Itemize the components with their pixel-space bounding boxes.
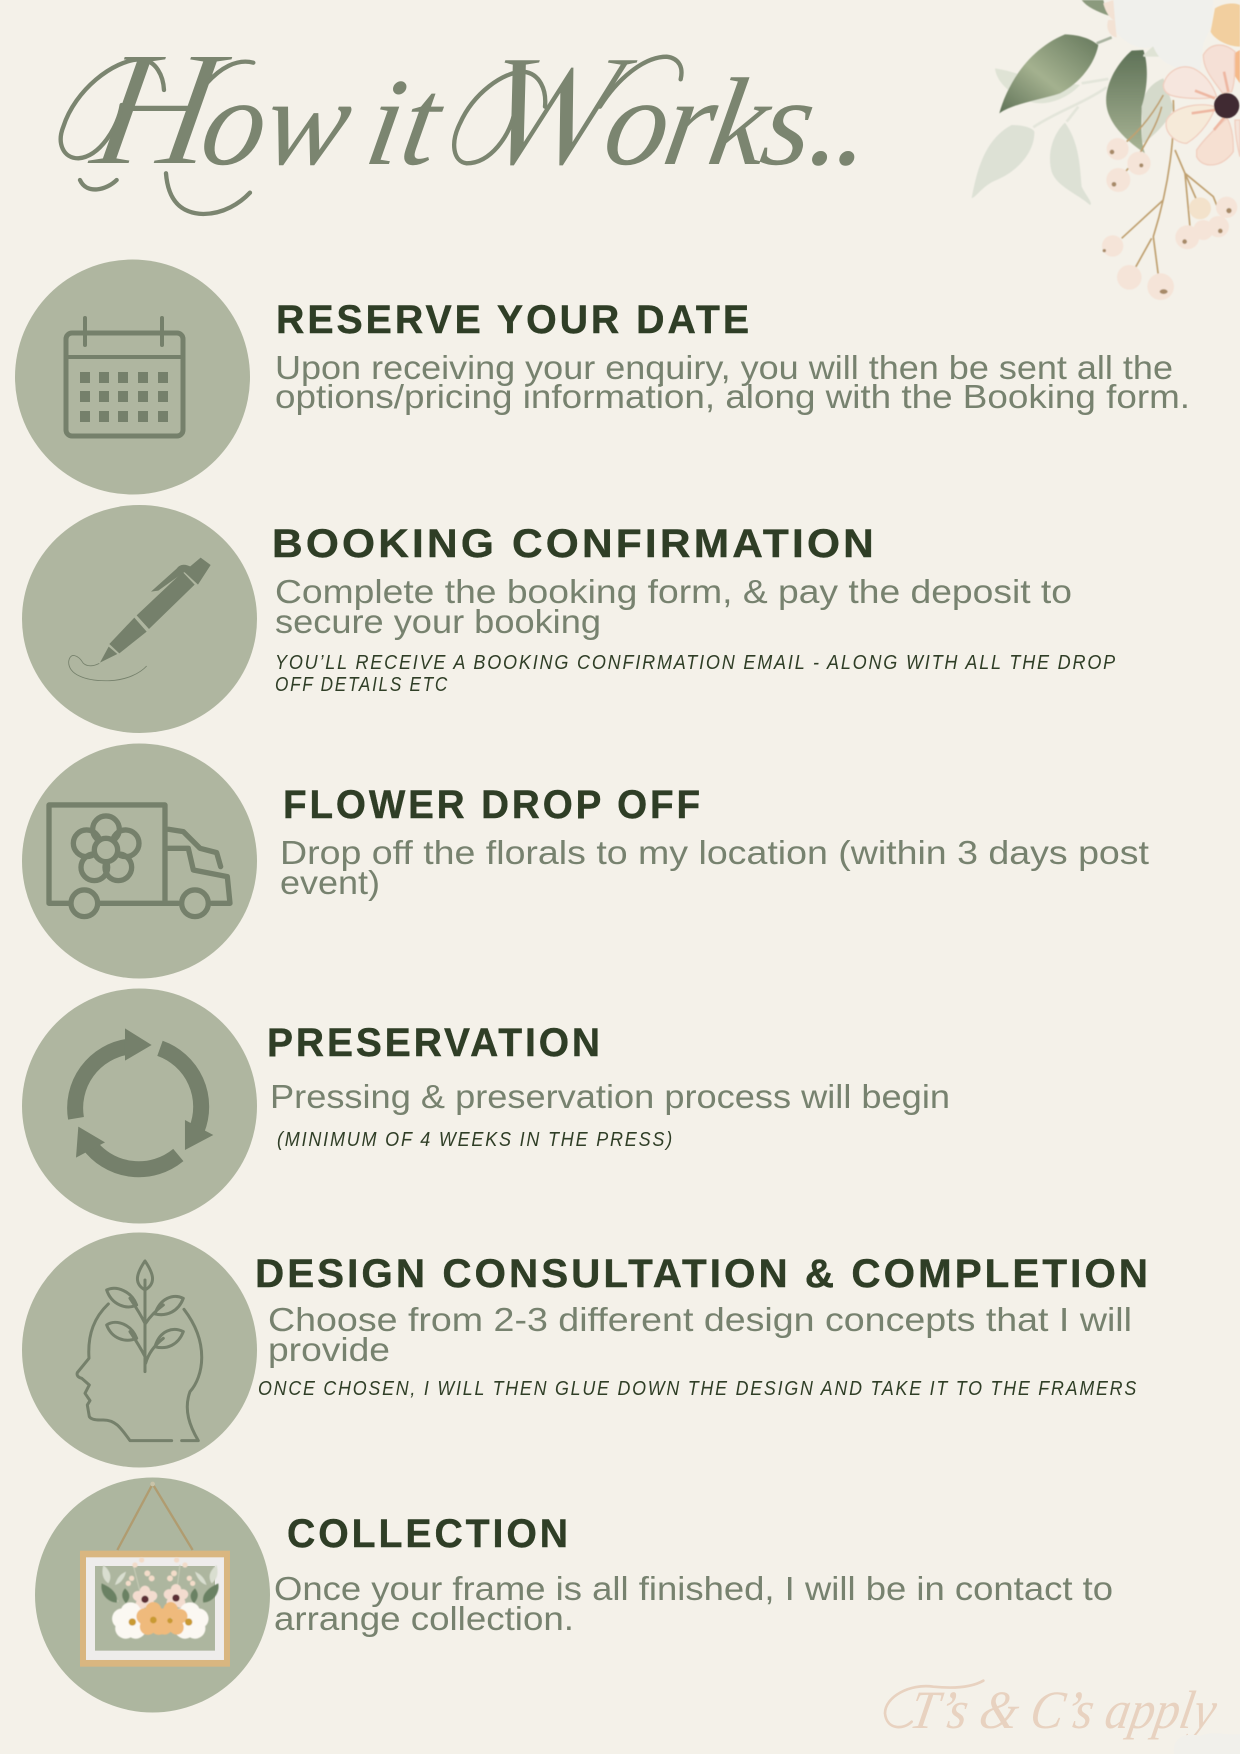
paper scrap, bottom right: [1174, 1733, 1240, 1754]
floral decoration: [972, 0, 1240, 300]
note: YOU’LL RECEIVE A BOOKING CONFIRMATION EMAIL - ALONG WITH ALL THE DROP: [275, 652, 1117, 674]
footer: terms note: T’s & C’s apply: [906, 1680, 1222, 1740]
step 2: booking confirmation: [22, 505, 1117, 733]
step 6: collection: [35, 1478, 1113, 1712]
heading: FLOWER DROP OFF: [283, 783, 703, 827]
note: ONCE CHOSEN, I WILL THEN GLUE DOWN THE DESIGN AND TAKE IT TO THE FRAMERS: [258, 1378, 1138, 1400]
body text: [275, 349, 1190, 415]
note: [275, 652, 1117, 696]
icon circle: [22, 1232, 257, 1468]
icon circle: [35, 1478, 270, 1712]
body text: secure your booking: [275, 603, 601, 640]
step 5: design consultation: [22, 1232, 1151, 1468]
note: OFF DETAILS ETC: [275, 674, 449, 696]
title flourish: [61, 57, 681, 214]
heading: COLLECTION: [287, 1512, 571, 1556]
step 1: reserve your date: [15, 260, 1190, 494]
icon: calendar: [66, 318, 183, 436]
step 3: flower drop off: [22, 744, 1149, 978]
body text: provide: [268, 1331, 390, 1368]
body text: Once your frame is all finished, I will be in contact to: [274, 1570, 1113, 1607]
heading: DESIGN CONSULTATION & COMPLETION: [255, 1252, 1151, 1296]
body text: [274, 1570, 1113, 1637]
body text: Drop off the florals to my location (within 3 days post: [280, 834, 1149, 871]
body text: [268, 1301, 1132, 1368]
note: (MINIMUM OF 4 WEEKS IN THE PRESS): [277, 1129, 674, 1151]
body text: [280, 834, 1149, 901]
body text: Complete the booking form, & pay the deposit to: [275, 573, 1072, 610]
icon: pen: [69, 558, 211, 681]
heading: PRESERVATION: [267, 1021, 603, 1065]
heading: RESERVE YOUR DATE: [276, 298, 752, 342]
body text: options/pricing information, along with the Booking form.: [275, 378, 1190, 415]
title: ..: [801, 54, 880, 192]
icon: head with plant: [77, 1261, 202, 1441]
step 4: preservation: [22, 988, 950, 1224]
title: it: [357, 54, 482, 192]
heading: BOOKING CONFIRMATION: [272, 522, 877, 566]
icon: cycle arrows: [75, 1028, 213, 1169]
body text: [275, 573, 1072, 640]
icon circle: [22, 505, 257, 733]
icon circle: [15, 260, 250, 494]
icon: hanging frame: [80, 1482, 230, 1667]
title: orks: [595, 54, 823, 192]
title: ow: [192, 54, 394, 192]
icon: truck: [49, 805, 230, 917]
title: [61, 17, 886, 214]
icon circle: [22, 988, 257, 1224]
body text: Pressing & preservation process will begin: [270, 1078, 950, 1115]
title: W: [469, 21, 646, 199]
body text: Choose from 2-3 different design concepts that I will: [268, 1301, 1132, 1338]
body text: Upon receiving your enquiry, you will then be sent all the: [275, 349, 1173, 386]
body text: arrange collection.: [274, 1600, 574, 1637]
body text: event): [280, 864, 380, 901]
title: H: [80, 17, 241, 200]
footer flourish: [885, 1681, 983, 1727]
icon circle: [22, 744, 257, 978]
